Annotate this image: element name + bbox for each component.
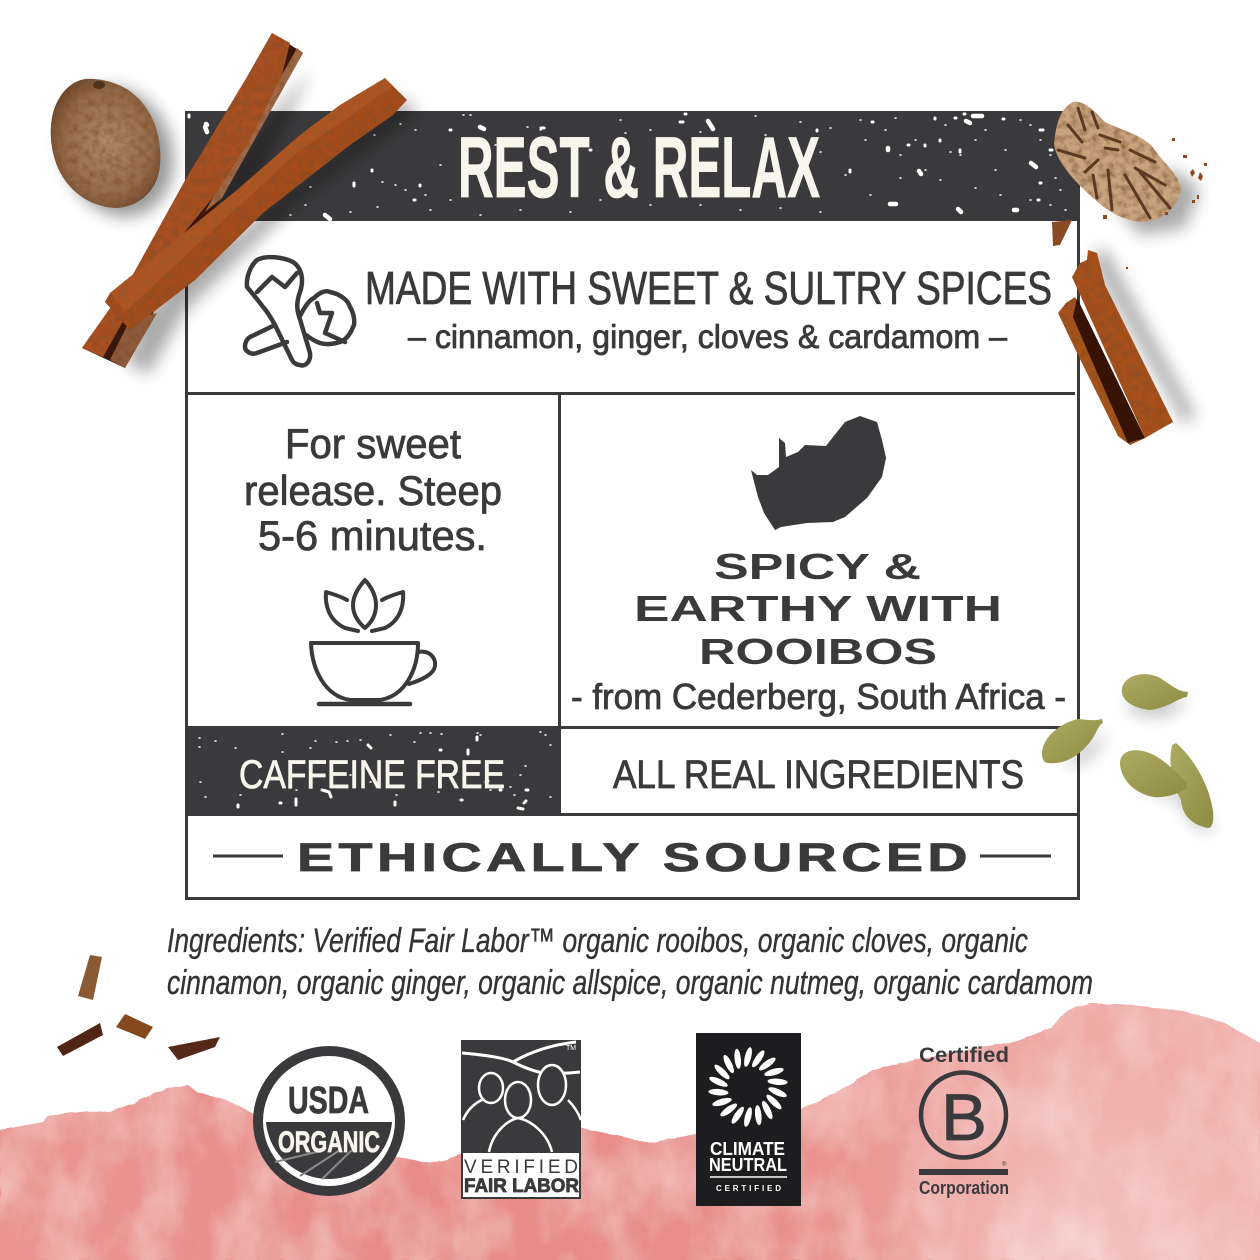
badge: caffeine free: CAFFEINE FREE [239,753,505,797]
title: REST & RELAX [458,120,820,216]
badge: certified B corporation: Certified [919,1044,1009,1067]
badge: climate neutral: NEUTRAL [709,1155,787,1175]
icon: map of South Africa [751,416,886,530]
ethically sourced: ETHICALLY SOURCED [297,836,972,880]
badge: verified fair labor: TM [566,1045,576,1052]
badge: USDA organic: USDA [288,1080,369,1122]
all real ingredients: ALL REAL INGREDIENTS [613,753,1024,797]
steeping text: 5-6 minutes. [258,512,487,559]
badge: certified B corporation: ® [1002,1161,1007,1168]
photo: grated nutmeg [1054,102,1200,235]
ingredients text: Ingredients: Verified Fair Labor™ organic rooibos, organic cloves, organic [167,922,1028,960]
ingredients text [167,922,1093,1002]
flavor heading: EARTHY WITH [634,588,1002,629]
steeping text: release. Steep [244,467,502,514]
steeping text [244,420,502,559]
badge: verified fair labor [461,1040,581,1199]
photo: spice bits [57,955,220,1060]
badge: climate neutral: CERTIFIED [716,1184,781,1193]
badge: caffeine free [186,727,559,815]
steeping text: For sweet [285,420,461,467]
badge: climate neutral: CLIMATE [710,1139,785,1159]
icon: tea cup with leaves [311,580,435,704]
flavor heading: SPICY & [714,546,921,587]
badge: certified B corporation: B [941,1080,987,1154]
header band [186,112,1079,221]
photo: cardamom pods [1042,674,1215,832]
badge: certified B corporation [919,1044,1009,1198]
watercolor wash background [0,1003,1260,1260]
photo: cinnamon piece [1058,245,1195,445]
spice list: – cinnamon, ginger, cloves & cardamom – [408,318,1008,355]
badge: verified fair labor: VERIFIED [464,1157,578,1178]
sun mark [708,1047,788,1127]
flavor heading [634,546,1002,672]
icon: cloves [245,257,354,365]
photo: cinnamon sticks [82,33,418,375]
badge: verified fair labor: FAIR LABOR [464,1176,579,1197]
panel: main product box [186,112,1079,898]
badge: climate neutral [696,1033,801,1206]
photo: whole nutmeg [45,72,191,232]
badge: USDA organic: ORGANIC [278,1126,380,1159]
divider lines [186,393,1079,814]
photo: crumbs [1052,138,1207,269]
badge: USDA organic [253,1046,405,1196]
flavor heading: ROOIBOS [699,631,937,672]
origin text: - from Cederberg, South Africa - [571,676,1066,717]
badge: certified B corporation: Corporation [919,1178,1009,1198]
made with heading: MADE WITH SWEET & SULTRY SPICES [365,262,1052,314]
